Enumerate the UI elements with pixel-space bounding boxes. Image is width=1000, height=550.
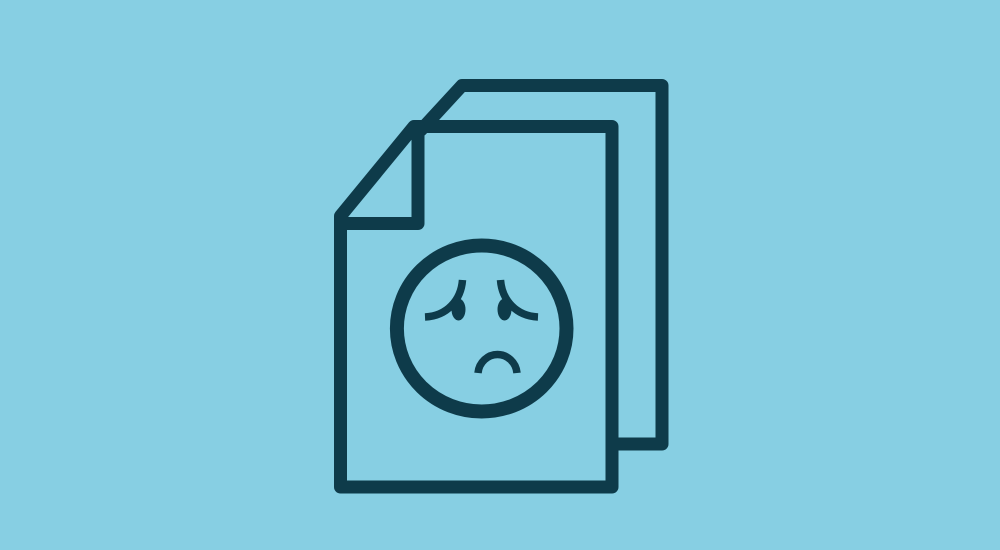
icon: front page with folded corner [340,126,612,487]
icon: back page [421,86,662,444]
icon: sad face [397,246,566,412]
right eye [498,298,512,320]
left eyebrow [425,280,462,317]
face outline [397,246,566,412]
right eyebrow [500,280,538,317]
frown [478,354,517,373]
left eye [452,298,466,320]
